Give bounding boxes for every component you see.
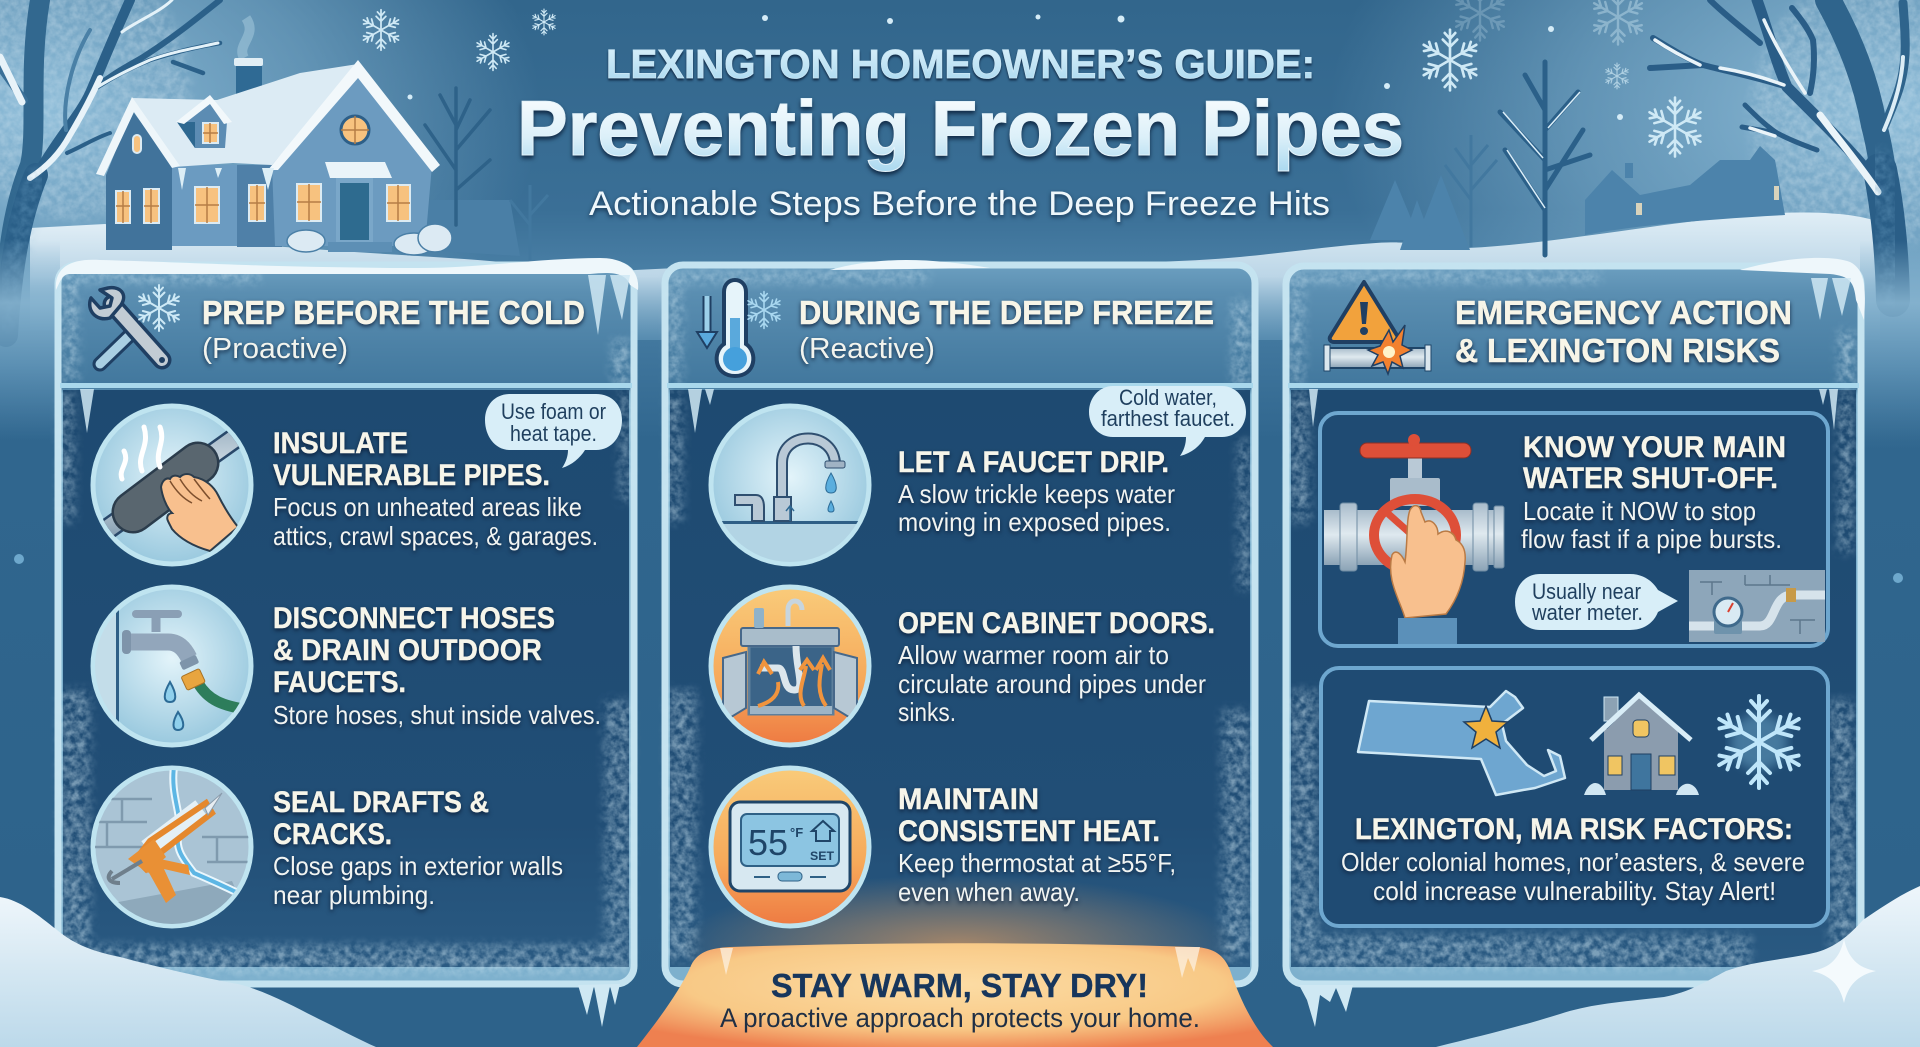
text: maintain: CONSISTENT HEAT. bbox=[898, 815, 1160, 848]
text: insulate: attics, crawl spaces, & garages. bbox=[273, 521, 598, 551]
text: risk factors: Older colonial homes, nor’easters, & severe bbox=[1341, 847, 1805, 877]
item: seal drafts bbox=[92, 767, 563, 927]
text: open cabinet doors: OPEN CABINET DOORS. bbox=[898, 607, 1215, 640]
panel 2 heading: (Reactive) bbox=[799, 333, 935, 365]
snow bushes bbox=[287, 224, 452, 255]
text: maintain: Keep thermostat at ≥55°F, bbox=[898, 848, 1176, 878]
illustration: water meter on basement wall bbox=[1689, 570, 1825, 642]
icon: caulk gun and brick wall bbox=[92, 767, 252, 927]
text: know your main: KNOW YOUR MAIN bbox=[1523, 431, 1786, 464]
map: Massachusetts with star bbox=[1358, 691, 1565, 795]
panel 3 ice frame bbox=[1286, 258, 1865, 1027]
text: let a faucet drip bbox=[898, 446, 1175, 537]
footer banner: stay warm, stay dry: STAY WARM, STAY DRY! bbox=[771, 967, 1148, 1004]
card: Lexington risk factors bbox=[1321, 668, 1828, 926]
panel 3 heading: EMERGENCY ACTION bbox=[1455, 294, 1792, 331]
panel: prep before the cold bbox=[56, 258, 638, 1027]
panel 2 heading bbox=[799, 294, 1214, 365]
callout: use foam or heat tape: heat tape. bbox=[510, 421, 597, 446]
icon: thermostat set to 55: 55 bbox=[748, 822, 788, 863]
bottom-right snow drift bbox=[1436, 886, 1920, 1047]
text: insulate: VULNERABLE PIPES. bbox=[273, 459, 550, 492]
bottom-left snow drift bbox=[0, 897, 376, 1047]
text: disconnect: FAUCETS. bbox=[273, 666, 406, 699]
item: insulate vulnerable pipes bbox=[93, 394, 622, 564]
panel 3 heading bbox=[1455, 294, 1792, 369]
lit windows bbox=[116, 116, 410, 223]
text: disconnect bbox=[273, 602, 601, 730]
panel 1 heading: PREP BEFORE THE COLD bbox=[202, 294, 585, 331]
card: main water shut-off bbox=[1320, 413, 1828, 646]
text: insulate bbox=[273, 427, 598, 551]
icon: wrench and snowflake bbox=[90, 285, 182, 364]
icon: open sink cabinet with warm air bbox=[711, 587, 869, 745]
icicles on eaves bbox=[178, 168, 274, 190]
panel 2 heading: DURING THE DEEP FREEZE bbox=[799, 294, 1214, 331]
text: maintain: even when away. bbox=[898, 877, 1080, 907]
text: risk factors bbox=[1341, 813, 1805, 906]
text: open cabinet doors: circulate around pipes under bbox=[898, 669, 1206, 699]
text: disconnect: DISCONNECT HOSES bbox=[273, 602, 555, 635]
footer banner: stay warm, stay dry: A proactive approach protects your home. bbox=[720, 1003, 1200, 1033]
text: seal: Close gaps in exterior walls bbox=[273, 851, 563, 881]
icon: thermostat set to 55: SET bbox=[810, 849, 835, 863]
snowy hills bbox=[30, 213, 1880, 340]
text: know your main bbox=[1521, 431, 1786, 554]
text: insulate: INSULATE bbox=[273, 427, 408, 460]
panel 2 ice frame bbox=[665, 260, 1255, 1015]
text: open cabinet doors bbox=[898, 607, 1215, 727]
text: open cabinet doors: Allow warmer room air to bbox=[898, 640, 1169, 670]
left tree bbox=[0, 0, 220, 335]
icon: insulated pipe with hand bbox=[93, 406, 251, 564]
side fog bbox=[0, 240, 1920, 450]
illustration: red valve and hand bbox=[1324, 434, 1504, 644]
text: seal bbox=[273, 786, 563, 910]
text: maintain: MAINTAIN bbox=[898, 783, 1039, 816]
item: open cabinet doors bbox=[711, 587, 1215, 745]
house illustration bbox=[96, 18, 452, 255]
text: disconnect: Store hoses, shut inside valves. bbox=[273, 700, 601, 730]
subtitle: Actionable Steps Before the Deep Freeze Hits bbox=[589, 185, 1330, 223]
text: let a faucet drip: A slow trickle keeps water bbox=[898, 479, 1175, 509]
item: maintain consistent heat bbox=[711, 768, 1176, 926]
panel 1 heading: (Proactive) bbox=[202, 333, 348, 365]
item: disconnect hoses bbox=[93, 586, 601, 746]
title: eyebrow: LEXINGTON HOMEOWNER’S GUIDE: bbox=[606, 41, 1315, 87]
callout: use foam or heat tape: Use foam or bbox=[501, 399, 606, 424]
right tree bbox=[1650, 0, 1905, 300]
chimney and smoke bbox=[234, 18, 263, 106]
distant village: trees and house silhouette bbox=[420, 62, 1785, 260]
panel 1 ice frame bbox=[56, 258, 638, 1027]
text: risk factors: LEXINGTON, MA RISK FACTORS: bbox=[1355, 813, 1793, 846]
text: seal: near plumbing. bbox=[273, 880, 435, 910]
callout: use foam or heat tape bbox=[485, 394, 622, 468]
icon: kitchen faucet dripping bbox=[710, 406, 870, 573]
text: seal: CRACKS. bbox=[273, 818, 392, 851]
text: open cabinet doors: sinks. bbox=[898, 697, 956, 727]
panel: emergency action and Lexington risks bbox=[1286, 258, 1865, 1027]
text: know your main: Locate it NOW to stop bbox=[1523, 496, 1756, 526]
item: let a faucet drip bbox=[710, 385, 1246, 573]
panel 1 heading bbox=[202, 294, 585, 365]
title block bbox=[517, 41, 1404, 223]
icon: thermostat set to 55: °F bbox=[790, 825, 803, 840]
text: seal: SEAL DRAFTS & bbox=[273, 786, 489, 819]
icon: glowing snowflake bbox=[1714, 696, 1804, 788]
panel 3 heading: & LEXINGTON RISKS bbox=[1455, 332, 1780, 369]
callout: usually near water meter bbox=[1515, 574, 1678, 630]
icon: colonial house bbox=[1584, 695, 1699, 795]
text: know your main: flow fast if a pipe bursts. bbox=[1521, 524, 1782, 554]
callout: cold water farthest faucet: farthest faucet. bbox=[1101, 406, 1235, 431]
callout: usually near water meter: water meter. bbox=[1531, 600, 1643, 625]
panel: during the deep freeze bbox=[665, 260, 1255, 1015]
title: main: Preventing Frozen Pipes bbox=[517, 84, 1404, 172]
footer banner: stay warm, stay dry bbox=[637, 943, 1273, 1047]
text: maintain bbox=[898, 783, 1176, 907]
icon: thermostat set to 55 bbox=[711, 768, 869, 926]
snowflakes bbox=[14, 0, 1903, 583]
text: risk factors: cold increase vulnerability. Stay Alert! bbox=[1373, 876, 1776, 906]
icon: warning triangle and burst pipe bbox=[1324, 282, 1431, 374]
icon: outdoor faucet and hose bbox=[93, 586, 251, 746]
text: insulate: Focus on unheated areas like bbox=[273, 492, 582, 522]
callout: cold water farthest faucet: Cold water, bbox=[1119, 385, 1217, 410]
door and canopy bbox=[325, 162, 392, 252]
callout: cold water farthest faucet bbox=[1089, 385, 1246, 456]
text: disconnect: & DRAIN OUTDOOR bbox=[273, 634, 542, 667]
text: let a faucet drip: moving in exposed pipes. bbox=[898, 507, 1171, 537]
text: know your main: WATER SHUT-OFF. bbox=[1523, 462, 1778, 495]
icon: thermometer, arrow and snowflake bbox=[697, 280, 782, 376]
callout: usually near water meter: Usually near bbox=[1532, 579, 1641, 604]
text: let a faucet drip: LET A FAUCET DRIP. bbox=[898, 446, 1169, 479]
